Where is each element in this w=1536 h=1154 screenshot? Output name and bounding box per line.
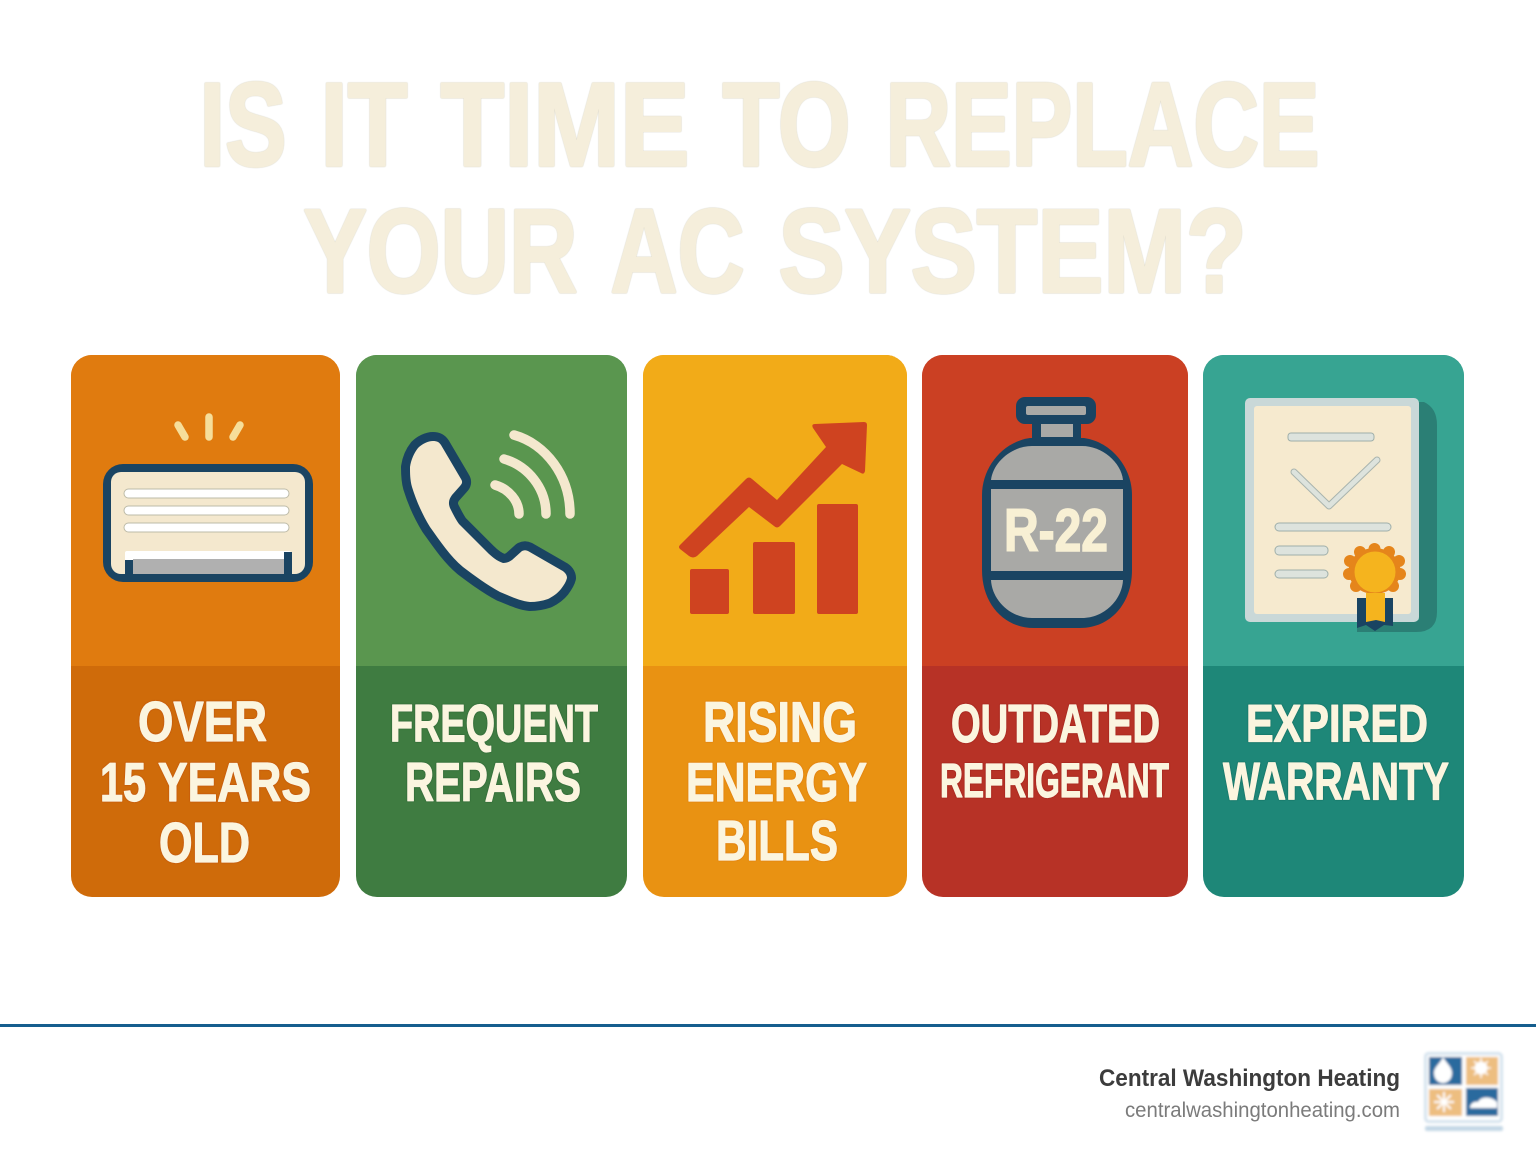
footer website: centralwashingtonheating.com [1125,1099,1400,1122]
icon: phone with signal [410,435,570,602]
title: IS [200,58,286,192]
label: frequent repairs [390,694,598,813]
label: outdated refrigerant: REFRIGERANT [940,755,1169,808]
label: expired warranty: EXPIRED [1246,694,1428,754]
footer rule [0,1024,1536,1027]
panel: over 15 years old [71,355,340,897]
icon: R-22 refrigerant tank: R-22 [1004,497,1108,564]
label: rising energy bills: ENERGY [686,751,867,813]
label: outdated refrigerant: OUTDATED [951,694,1160,754]
label: over 15 years old [100,690,311,875]
panel: expired warranty [1203,355,1464,897]
label: rising energy bills [686,690,867,873]
panel: frequent repairs [356,355,627,897]
label: over 15 years old: 15 [100,751,146,813]
title: TIME [440,58,690,192]
label: over 15 years old: OVER [138,690,267,754]
title: REPLACE [886,58,1320,192]
title [200,58,1320,318]
title: SYSTEM? [778,185,1246,318]
label: rising energy bills: RISING [703,690,857,754]
title: IT [320,58,408,192]
label: expired warranty [1223,694,1449,812]
label: frequent repairs: FREQUENT [390,694,598,754]
label: expired warranty: WARRANTY [1223,752,1449,812]
icon: rising bar chart [679,422,867,614]
icon: company logo [1425,1054,1503,1131]
label: over 15 years old: YEARS [158,751,311,813]
label: outdated refrigerant [940,694,1169,808]
label: over 15 years old: OLD [159,811,250,875]
icon: air conditioner [103,417,313,582]
label: frequent repairs: REPAIRS [405,751,581,813]
icon: R-22 refrigerant tank [982,397,1132,628]
title: YOUR [304,185,578,318]
footer brand name: Central Washington Heating [1099,1065,1400,1092]
icon: warranty certificate [1245,398,1437,632]
title: TO [722,58,850,192]
panel: rising energy bills [643,355,907,897]
title: AC [610,185,744,318]
label: rising energy bills: BILLS [716,809,838,873]
panel: outdated refrigerant [922,355,1188,897]
